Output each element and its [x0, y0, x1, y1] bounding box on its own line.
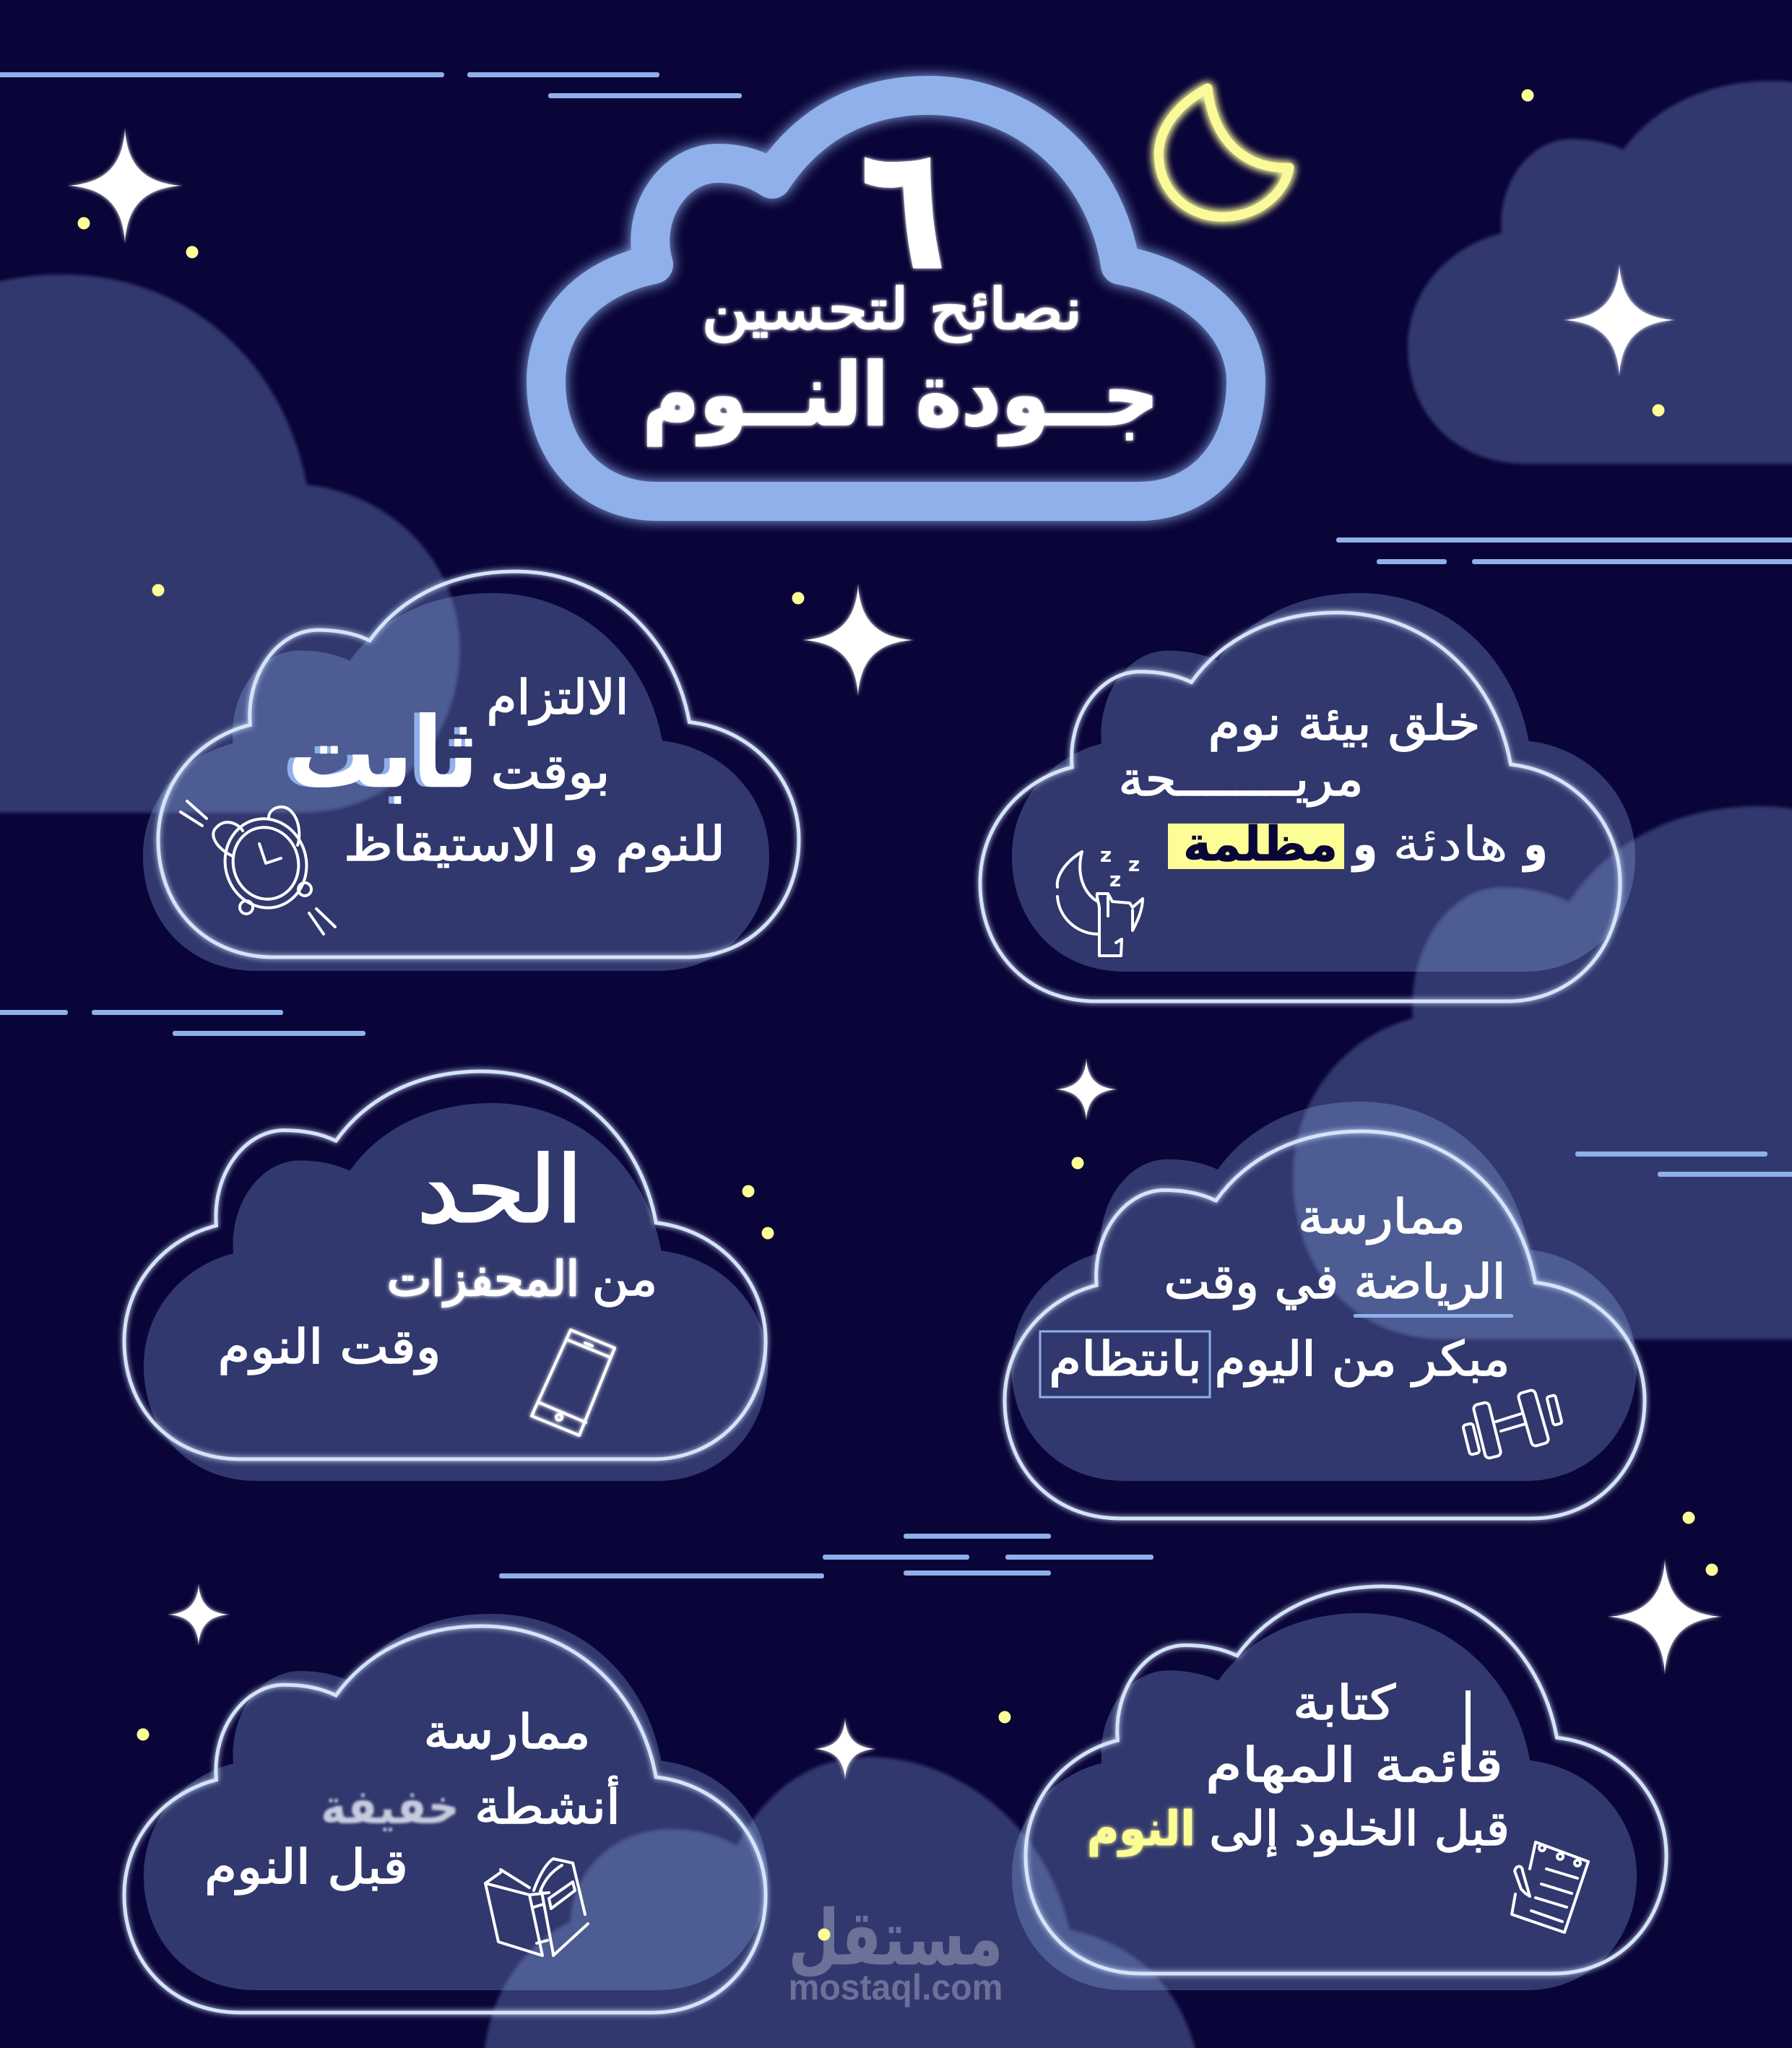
- icon: phone: [532, 1330, 615, 1435]
- cloud fill: [143, 593, 769, 971]
- cloud fill: [144, 1103, 768, 1481]
- icon: dumbbell: [1463, 1389, 1562, 1459]
- text word: و: [1351, 816, 1377, 873]
- text line: مريــــــــحة: [1118, 751, 1364, 807]
- icon: notepad: [1512, 1842, 1588, 1932]
- text word light: هادئة: [1393, 816, 1508, 872]
- text line: الالتزام: [487, 670, 628, 725]
- panel: tip limit stimulants: [124, 1071, 768, 1481]
- title number: ٦: [862, 113, 944, 306]
- speed lines: [0, 72, 1792, 1578]
- panel: tip consistent schedule: [143, 571, 799, 971]
- heading word: الحد: [417, 1136, 582, 1243]
- boxed word: [1040, 1331, 1210, 1397]
- text line: قائمة المهام: [1206, 1737, 1503, 1793]
- highlighted word shadow: ثابت: [282, 696, 472, 810]
- tall letter stroke: [1466, 1690, 1471, 1770]
- panel: tip exercise: [1005, 1102, 1645, 1518]
- stars: [67, 128, 1723, 1780]
- highlighted word: مظلمة: [1183, 816, 1338, 872]
- watermark dot: [818, 1929, 831, 1940]
- cloud outline: [1005, 1131, 1645, 1518]
- cloud fill: [1011, 1102, 1637, 1481]
- text line: كتابة: [1293, 1675, 1396, 1731]
- text line: بوقت: [491, 744, 610, 800]
- icon: sleeping moon: z: [1109, 868, 1121, 891]
- icon: moon: [1159, 88, 1289, 217]
- glowing word: المحفزات: [387, 1251, 579, 1307]
- header cloud outline: [546, 95, 1246, 501]
- panel: tip light activities: [124, 1614, 768, 2013]
- title line 2: جــودة النــوم: [643, 345, 1159, 446]
- text line: قبل الخلود إلى: [1209, 1801, 1510, 1857]
- icon: book: [485, 1859, 588, 1956]
- highlight box: [1168, 824, 1344, 869]
- text line: قبل النوم: [204, 1839, 408, 1895]
- faded word: خفيفة: [321, 1779, 459, 1835]
- text line: خلق بيئة نوم: [1208, 696, 1481, 752]
- watermark arabic: مستقل: [789, 1894, 1003, 1982]
- cloud fill: [1012, 593, 1635, 972]
- text word: أنشطة: [475, 1776, 620, 1835]
- panel: tip sleep environment: [980, 593, 1635, 1001]
- title line 1: نصائح لتحسين: [702, 277, 1082, 343]
- text line: الرياضة في وقت: [1164, 1254, 1505, 1310]
- text line: ممارسة: [1298, 1189, 1466, 1245]
- text line: وقت النوم: [218, 1319, 441, 1375]
- cloud fill: [1012, 1613, 1637, 1990]
- boxed word: بانتظام: [1049, 1331, 1202, 1387]
- cloud outline: [980, 613, 1620, 1001]
- icon: sleeping moon: z: [1100, 843, 1112, 867]
- watermark latin: mostaql.com: [789, 1967, 1003, 2008]
- panel: tip to-do list: [1012, 1586, 1666, 1990]
- cloud outline: [124, 1071, 766, 1459]
- text line: للنوم و الاستيقاظ: [344, 816, 725, 872]
- text word: و: [1522, 816, 1547, 873]
- highlighted word: ثابت: [287, 696, 478, 810]
- cloud outline: [1026, 1586, 1666, 1974]
- text word: من: [592, 1251, 657, 1307]
- cloud outline: [158, 571, 799, 957]
- underline: [1354, 1314, 1513, 1318]
- cloud fill: [144, 1614, 768, 1990]
- text line: مبكر من اليوم: [1215, 1331, 1510, 1387]
- cloud outline: [124, 1626, 766, 2013]
- panel: header: [546, 88, 1289, 501]
- text line: ممارسة: [423, 1704, 591, 1760]
- icon: sleeping moon: [1057, 843, 1143, 956]
- highlighted word: النوم: [1087, 1801, 1195, 1857]
- watermark: [789, 1894, 1003, 2008]
- yellow dots: [78, 90, 1718, 1741]
- icon: sleeping moon: z: [1128, 852, 1140, 876]
- icon: alarm clock: [181, 801, 335, 934]
